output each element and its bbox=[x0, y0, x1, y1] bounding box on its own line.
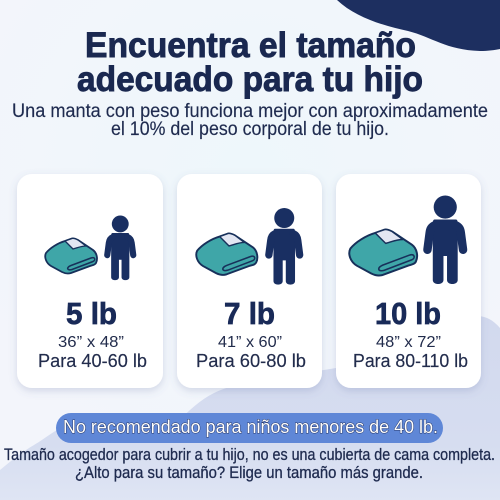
icon: folded blanket medium bbox=[196, 233, 257, 275]
dimensions: 41” x 60” bbox=[218, 334, 282, 351]
child weight range: Para 80-110 lb bbox=[353, 351, 468, 371]
heading bbox=[77, 26, 423, 99]
weight: 10 lb bbox=[375, 296, 441, 331]
dimensions: 36” x 48” bbox=[58, 334, 124, 351]
footer note: ¿Alto para su tamaño? Elige un tamaño más grande. bbox=[75, 463, 423, 482]
icon: child large bbox=[427, 196, 463, 284]
icon: child small bbox=[107, 216, 133, 280]
heading: adecuado para tu hijo bbox=[77, 60, 423, 99]
panel: 10 lb bbox=[336, 174, 481, 388]
heading: Encuentra el tamaño bbox=[85, 26, 416, 65]
weight: 5 lb bbox=[66, 296, 117, 331]
callout: age warning pill bbox=[56, 413, 443, 443]
subtitle: el 10% del peso corporal de tu hijo. bbox=[111, 119, 389, 140]
callout: age warning pill: No recomendado para niños menores de 40 lb. bbox=[63, 416, 438, 437]
decorative blob: top right bbox=[337, 0, 500, 51]
subtitle bbox=[12, 101, 488, 140]
dimensions: 48” x 72” bbox=[376, 334, 441, 351]
panel: 7 lb bbox=[177, 174, 322, 388]
child weight range: Para 60-80 lb bbox=[196, 351, 306, 371]
icon: folded blanket small bbox=[45, 238, 97, 274]
footer note bbox=[4, 445, 495, 482]
weight: 7 lb bbox=[224, 296, 275, 331]
icon: child medium bbox=[269, 208, 300, 285]
decorative hills: bottom bbox=[0, 316, 500, 500]
panel: 5 lb bbox=[17, 174, 163, 388]
child weight range: Para 40-60 lb bbox=[38, 351, 147, 371]
subtitle: Una manta con peso funciona mejor con aproximadamente bbox=[12, 101, 488, 122]
icon: folded blanket large bbox=[349, 229, 417, 276]
